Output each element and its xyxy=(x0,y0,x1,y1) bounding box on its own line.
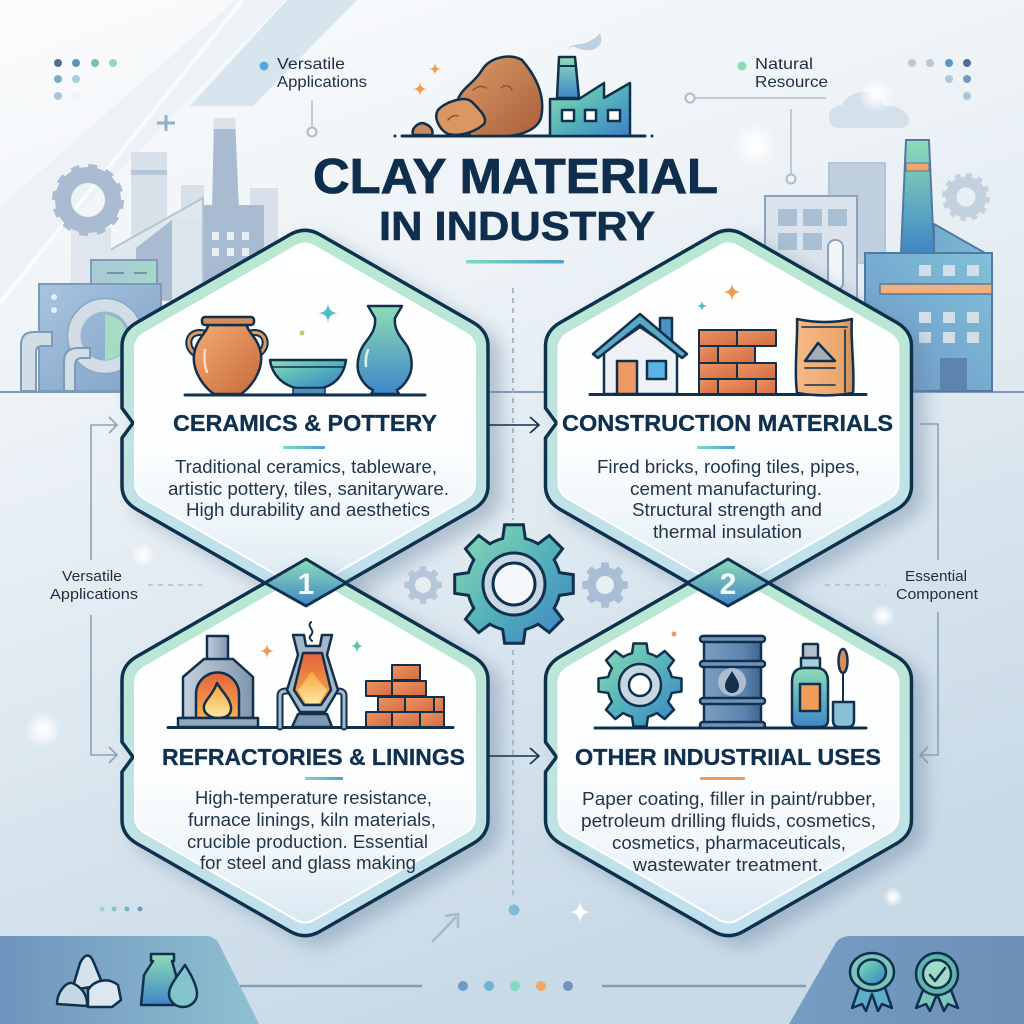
sparkle and arrow accents xyxy=(432,900,592,942)
icon: check ribbon xyxy=(916,953,958,1011)
description: cosmetics, pharmaceuticals, xyxy=(612,833,846,853)
icons: house bricks bag xyxy=(590,314,866,395)
description: Fired bricks, roofing tiles, pipes, xyxy=(597,457,860,477)
label: versatile applications side: Versatile xyxy=(62,568,122,585)
description: wastewater treatment. xyxy=(632,855,823,875)
title: IN INDUSTRY xyxy=(379,203,655,249)
header icon: clay rocks xyxy=(394,57,654,138)
glow lights xyxy=(25,77,903,907)
sparkles beside rocks xyxy=(412,62,442,97)
description: High durability and aesthetics xyxy=(186,500,430,520)
icon: left background gear xyxy=(55,167,121,233)
description xyxy=(597,457,860,542)
center dashed axis xyxy=(508,288,520,916)
badge: 2 xyxy=(687,559,769,606)
badge: 1: 1 xyxy=(298,568,314,601)
header icon: factory xyxy=(550,33,630,136)
panel: construction materials xyxy=(546,230,912,602)
label: versatile applications top: Applications xyxy=(277,74,367,91)
description: High-temperature resistance, xyxy=(195,788,432,808)
description: furnace linings, kiln materials, xyxy=(188,810,436,830)
label: versatile applications top xyxy=(260,56,367,136)
icon: right background gear xyxy=(944,175,988,219)
top left dot grid xyxy=(54,59,117,100)
description xyxy=(581,789,876,875)
panel: other industrial uses xyxy=(546,564,912,936)
description xyxy=(187,788,436,873)
label: essential component side: Essential xyxy=(905,568,967,585)
flow arrows between panels xyxy=(488,417,539,764)
description: cement manufacturing. xyxy=(630,479,822,499)
description: crucible production. Essential xyxy=(187,832,428,852)
badge: 2: 2 xyxy=(720,568,736,601)
label: versatile applications side xyxy=(50,568,138,603)
description: petroleum drilling fluids, cosmetics, xyxy=(581,811,876,831)
description: for steel and glass making xyxy=(200,853,416,873)
right background factory xyxy=(765,140,992,391)
title: CLAY MATERIAL xyxy=(313,150,718,204)
description: artistic pottery, tiles, sanitaryware. xyxy=(168,479,449,499)
bottom right panel xyxy=(789,936,1024,1024)
icon: rosette xyxy=(850,953,894,1011)
label: versatile applications top: Versatile xyxy=(277,56,345,73)
heading: CONSTRUCTION MATERIALS xyxy=(562,410,893,436)
panel: refractories and linings xyxy=(122,564,488,936)
heading: CERAMICS & POTTERY xyxy=(173,410,437,436)
icon: minerals xyxy=(57,956,121,1007)
icons: jar bowl vase xyxy=(185,306,425,395)
icon: central gear xyxy=(455,525,573,643)
top right dot grid xyxy=(908,59,971,100)
side connectors xyxy=(91,417,938,763)
description: Traditional ceramics, tableware, xyxy=(175,457,437,477)
small dots left xyxy=(100,906,142,912)
heading: OTHER INDUSTRIIAL USES xyxy=(575,744,881,770)
description: thermal insulation xyxy=(653,522,802,542)
left background factory xyxy=(21,118,278,391)
title xyxy=(313,150,718,264)
plus mark xyxy=(157,115,175,131)
label: essential component side: Component xyxy=(896,586,979,603)
bottom left panel xyxy=(0,936,259,1024)
label: natural resource top xyxy=(686,56,828,184)
description xyxy=(168,457,449,520)
label: natural resource top: Natural xyxy=(755,56,813,73)
description: Paper coating, filler in paint/rubber, xyxy=(582,789,876,809)
bottom divider with dots xyxy=(240,981,806,991)
label: natural resource top: Resource xyxy=(755,74,828,91)
label: essential component side xyxy=(896,568,979,603)
icons: kiln crucible bricks xyxy=(168,622,453,728)
panel: ceramics and pottery xyxy=(122,230,488,602)
icon: small gear left xyxy=(404,566,442,604)
description: Structural strength and xyxy=(632,500,822,520)
cloud xyxy=(829,92,909,128)
heading: REFRACTORIES & LININGS xyxy=(162,744,465,770)
icon: bottle and drop xyxy=(141,954,197,1007)
badge: 1 xyxy=(265,559,346,606)
label: versatile applications side: Applications xyxy=(50,586,138,603)
icons: gear barrel bottle xyxy=(595,636,866,728)
icon: small gear right xyxy=(582,562,628,608)
